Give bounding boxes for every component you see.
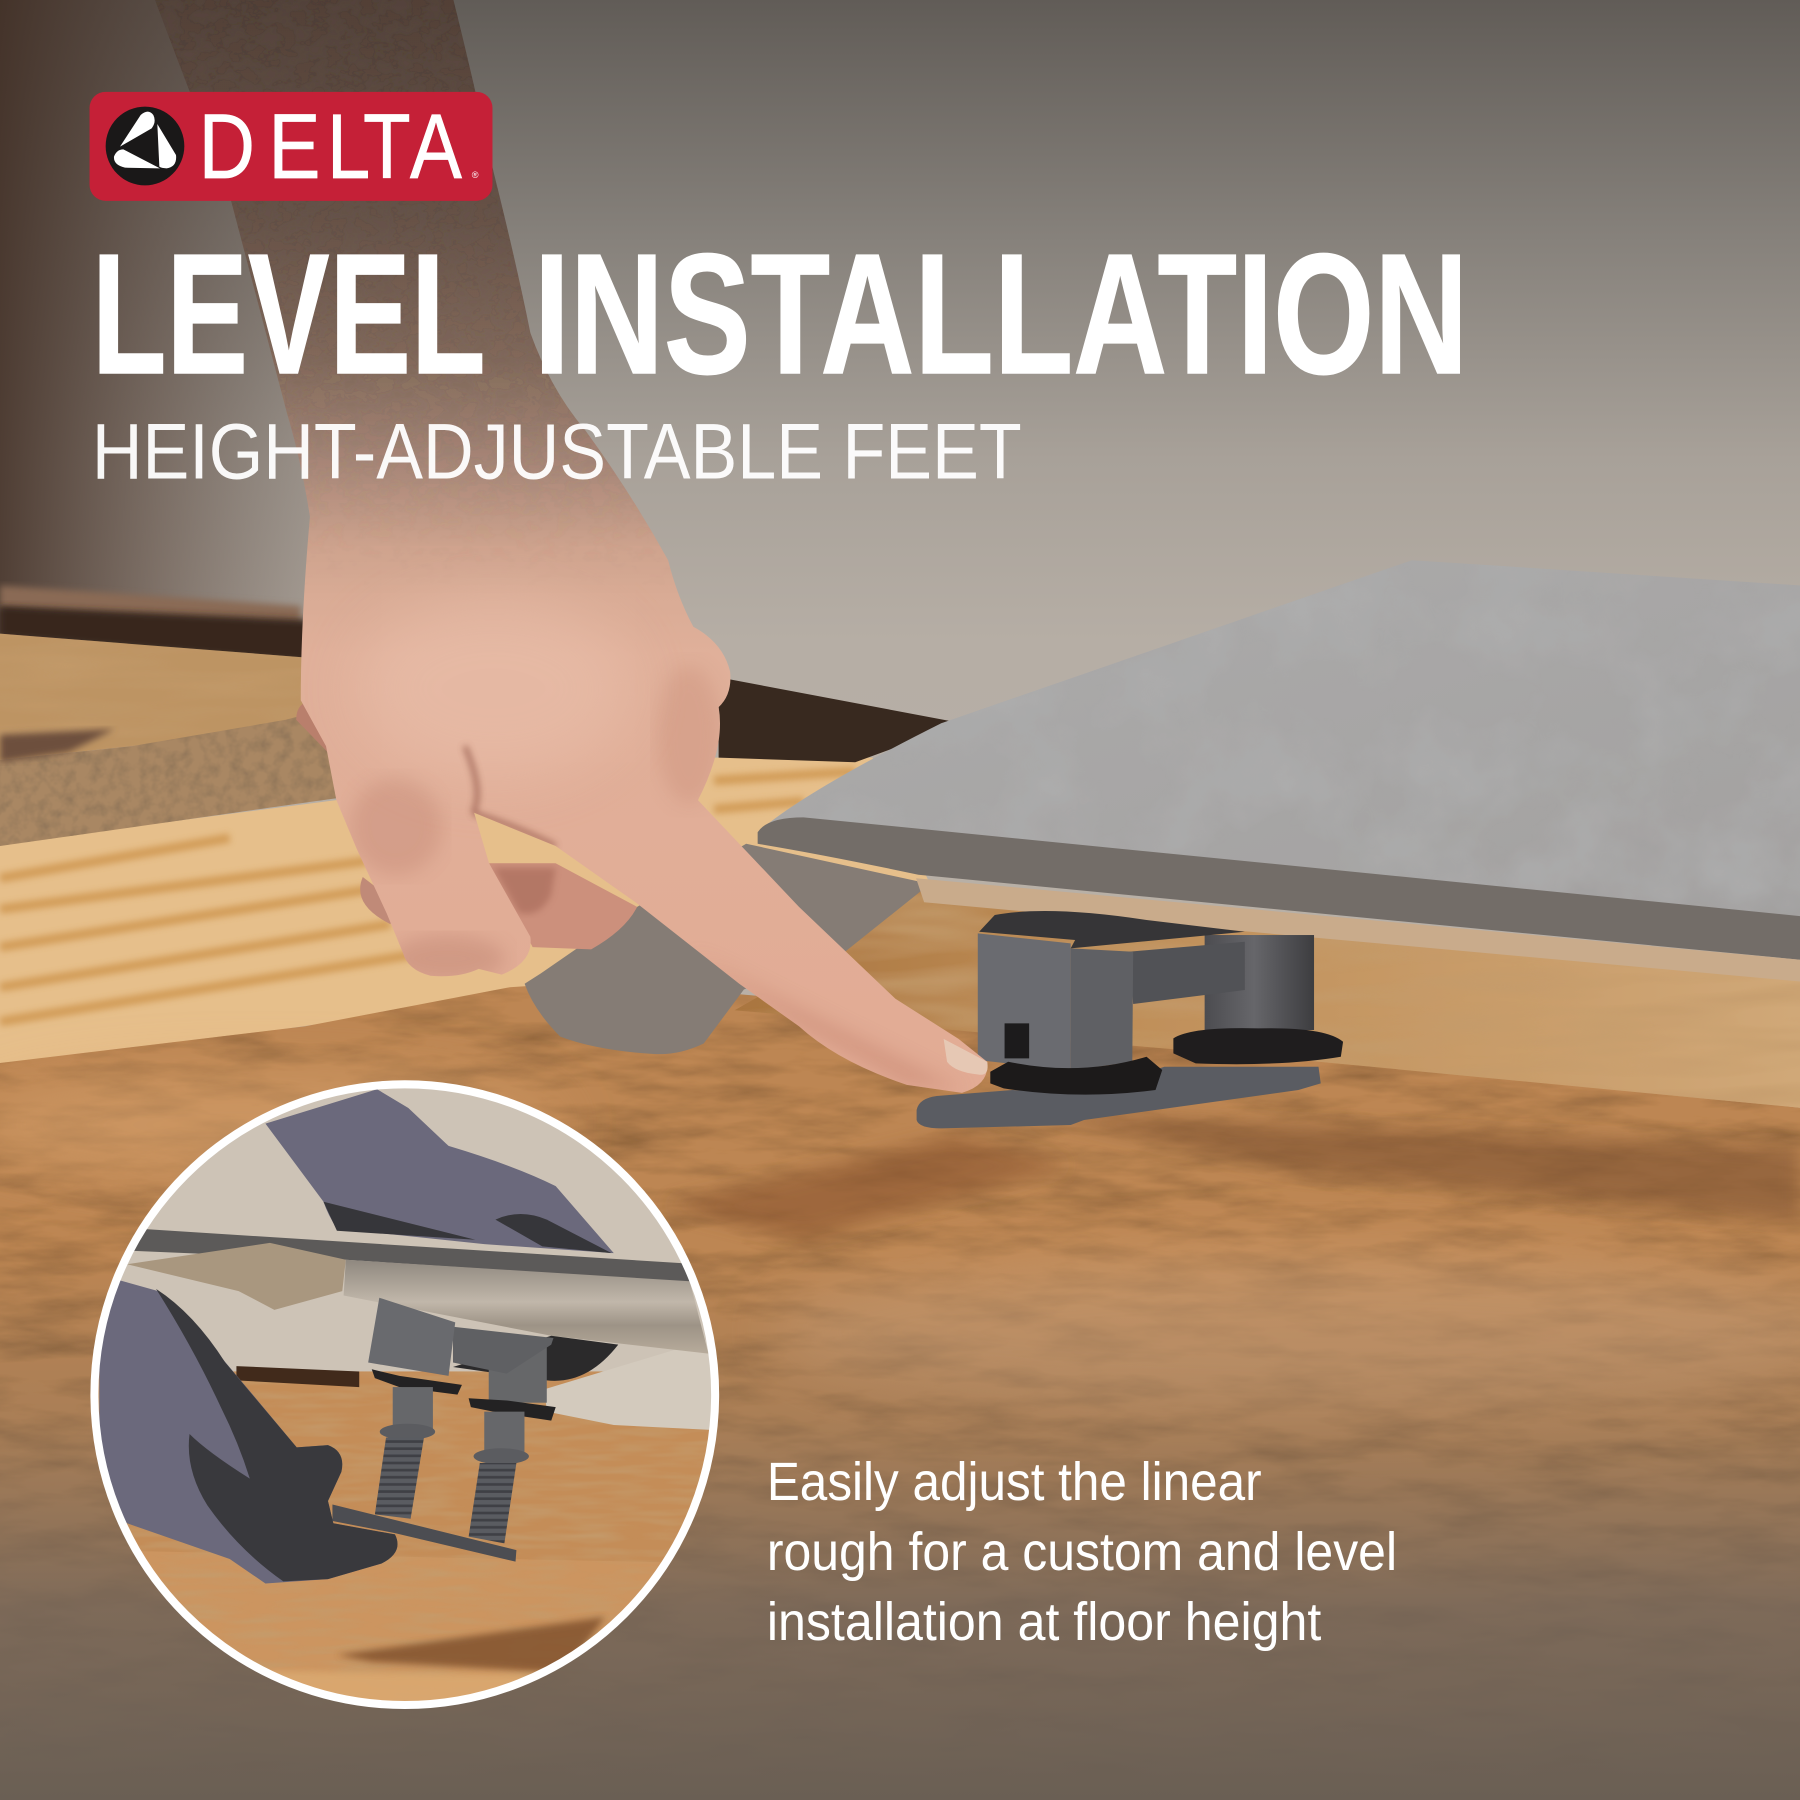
Delta logo	[90, 92, 492, 201]
inset floor	[143, 1552, 658, 1701]
foot block	[978, 933, 1071, 1071]
pinky finger	[296, 700, 333, 758]
panel end face	[0, 706, 339, 846]
inset thumb dark	[495, 1214, 612, 1253]
near knob	[990, 1057, 1162, 1095]
body text: Easily adjust the linear	[767, 1453, 1262, 1512]
folded membrane flap	[525, 844, 930, 1054]
inset tan felt	[127, 1243, 346, 1310]
inset bracket	[453, 1327, 553, 1374]
bent finger shade	[350, 778, 442, 875]
body text: rough for a custom and level	[767, 1523, 1397, 1582]
crease between fingers	[465, 746, 556, 846]
rear finger	[360, 877, 402, 924]
far threaded post	[1205, 935, 1314, 1030]
background: OSB floor	[0, 982, 1800, 1800]
inset white ring	[94, 1084, 715, 1705]
body text: installation at floor height	[767, 1593, 1321, 1652]
linear drain: felt membrane	[758, 560, 1800, 918]
linear drain: edge band	[758, 817, 1800, 960]
title: LEVEL	[92, 219, 486, 410]
inset floor bottom light	[274, 1671, 530, 1701]
inset palm dark	[324, 1202, 475, 1240]
foot base plate	[917, 1067, 1321, 1128]
inset right wall part	[546, 1371, 712, 1430]
floor shading patches	[0, 1073, 1800, 1412]
dark band	[0, 606, 310, 664]
panel top surface	[0, 634, 339, 760]
inset far knob	[469, 1398, 556, 1421]
title	[92, 219, 1468, 410]
body text	[767, 1453, 1397, 1652]
inset glove dark palm	[156, 1289, 398, 1581]
curled finger shadow	[494, 868, 556, 914]
curled finger	[489, 863, 637, 949]
logo badge	[90, 92, 492, 201]
inset near knob	[372, 1369, 462, 1395]
background: wall	[0, 0, 1800, 1148]
inset far collar	[474, 1448, 529, 1464]
fingernail	[944, 1039, 988, 1075]
bottom fade overlay	[0, 1251, 1800, 1800]
blurred sill above dark band	[0, 585, 301, 626]
arm hair	[156, 0, 652, 538]
inset far thread	[469, 1463, 516, 1543]
far knob	[1173, 1028, 1343, 1064]
linear drain: tan underside	[916, 878, 1800, 982]
hand shading	[138, 0, 964, 1091]
inset far post	[489, 1345, 547, 1403]
inset steel channel	[344, 1260, 708, 1354]
inset scene	[87, 1077, 725, 1720]
inset wall	[99, 1088, 706, 1372]
adjustable foot	[917, 911, 1343, 1128]
logo registered mark: ®	[472, 170, 479, 180]
dark gap behind drain	[719, 677, 962, 762]
subtitle: HEIGHT-ADJUSTABLE FEET	[92, 407, 1022, 496]
back of hand highlight	[392, 620, 595, 758]
title: INSTALLATION	[534, 219, 1468, 410]
inset near thread	[375, 1438, 424, 1519]
logo emblem	[106, 107, 184, 185]
hand pointing at foot	[138, 0, 988, 1093]
top plate	[979, 911, 1245, 948]
arm and hand shape	[155, 0, 987, 1093]
knuckle shade	[659, 670, 718, 798]
inset circle photo	[87, 1077, 725, 1720]
inset lower glove	[99, 1280, 398, 1584]
inset near stem	[393, 1387, 433, 1429]
wood grain stripes	[0, 771, 855, 1022]
inset dark rim	[134, 1229, 690, 1282]
bracket arm	[1129, 942, 1245, 1004]
inset near collar	[380, 1424, 435, 1440]
background: right wood beam	[735, 884, 1800, 1108]
inset dark line	[236, 1366, 359, 1387]
foot block side	[1071, 948, 1133, 1071]
front wood board	[0, 758, 930, 1070]
inset far stem	[484, 1412, 524, 1454]
background: left wood framing	[0, 585, 930, 1070]
inset foot block	[368, 1298, 455, 1376]
inset base plate	[332, 1505, 516, 1562]
inset dark under thumb	[453, 1336, 618, 1381]
fingertip shade	[400, 934, 504, 976]
logo wordmark: DELTA	[199, 96, 462, 198]
block notch	[1005, 1023, 1029, 1058]
inset floor patch	[337, 1617, 605, 1673]
dark patch on panel	[0, 729, 115, 762]
inset top glove	[265, 1089, 614, 1253]
inset wood	[98, 1371, 709, 1562]
index finger shade	[748, 986, 941, 1088]
